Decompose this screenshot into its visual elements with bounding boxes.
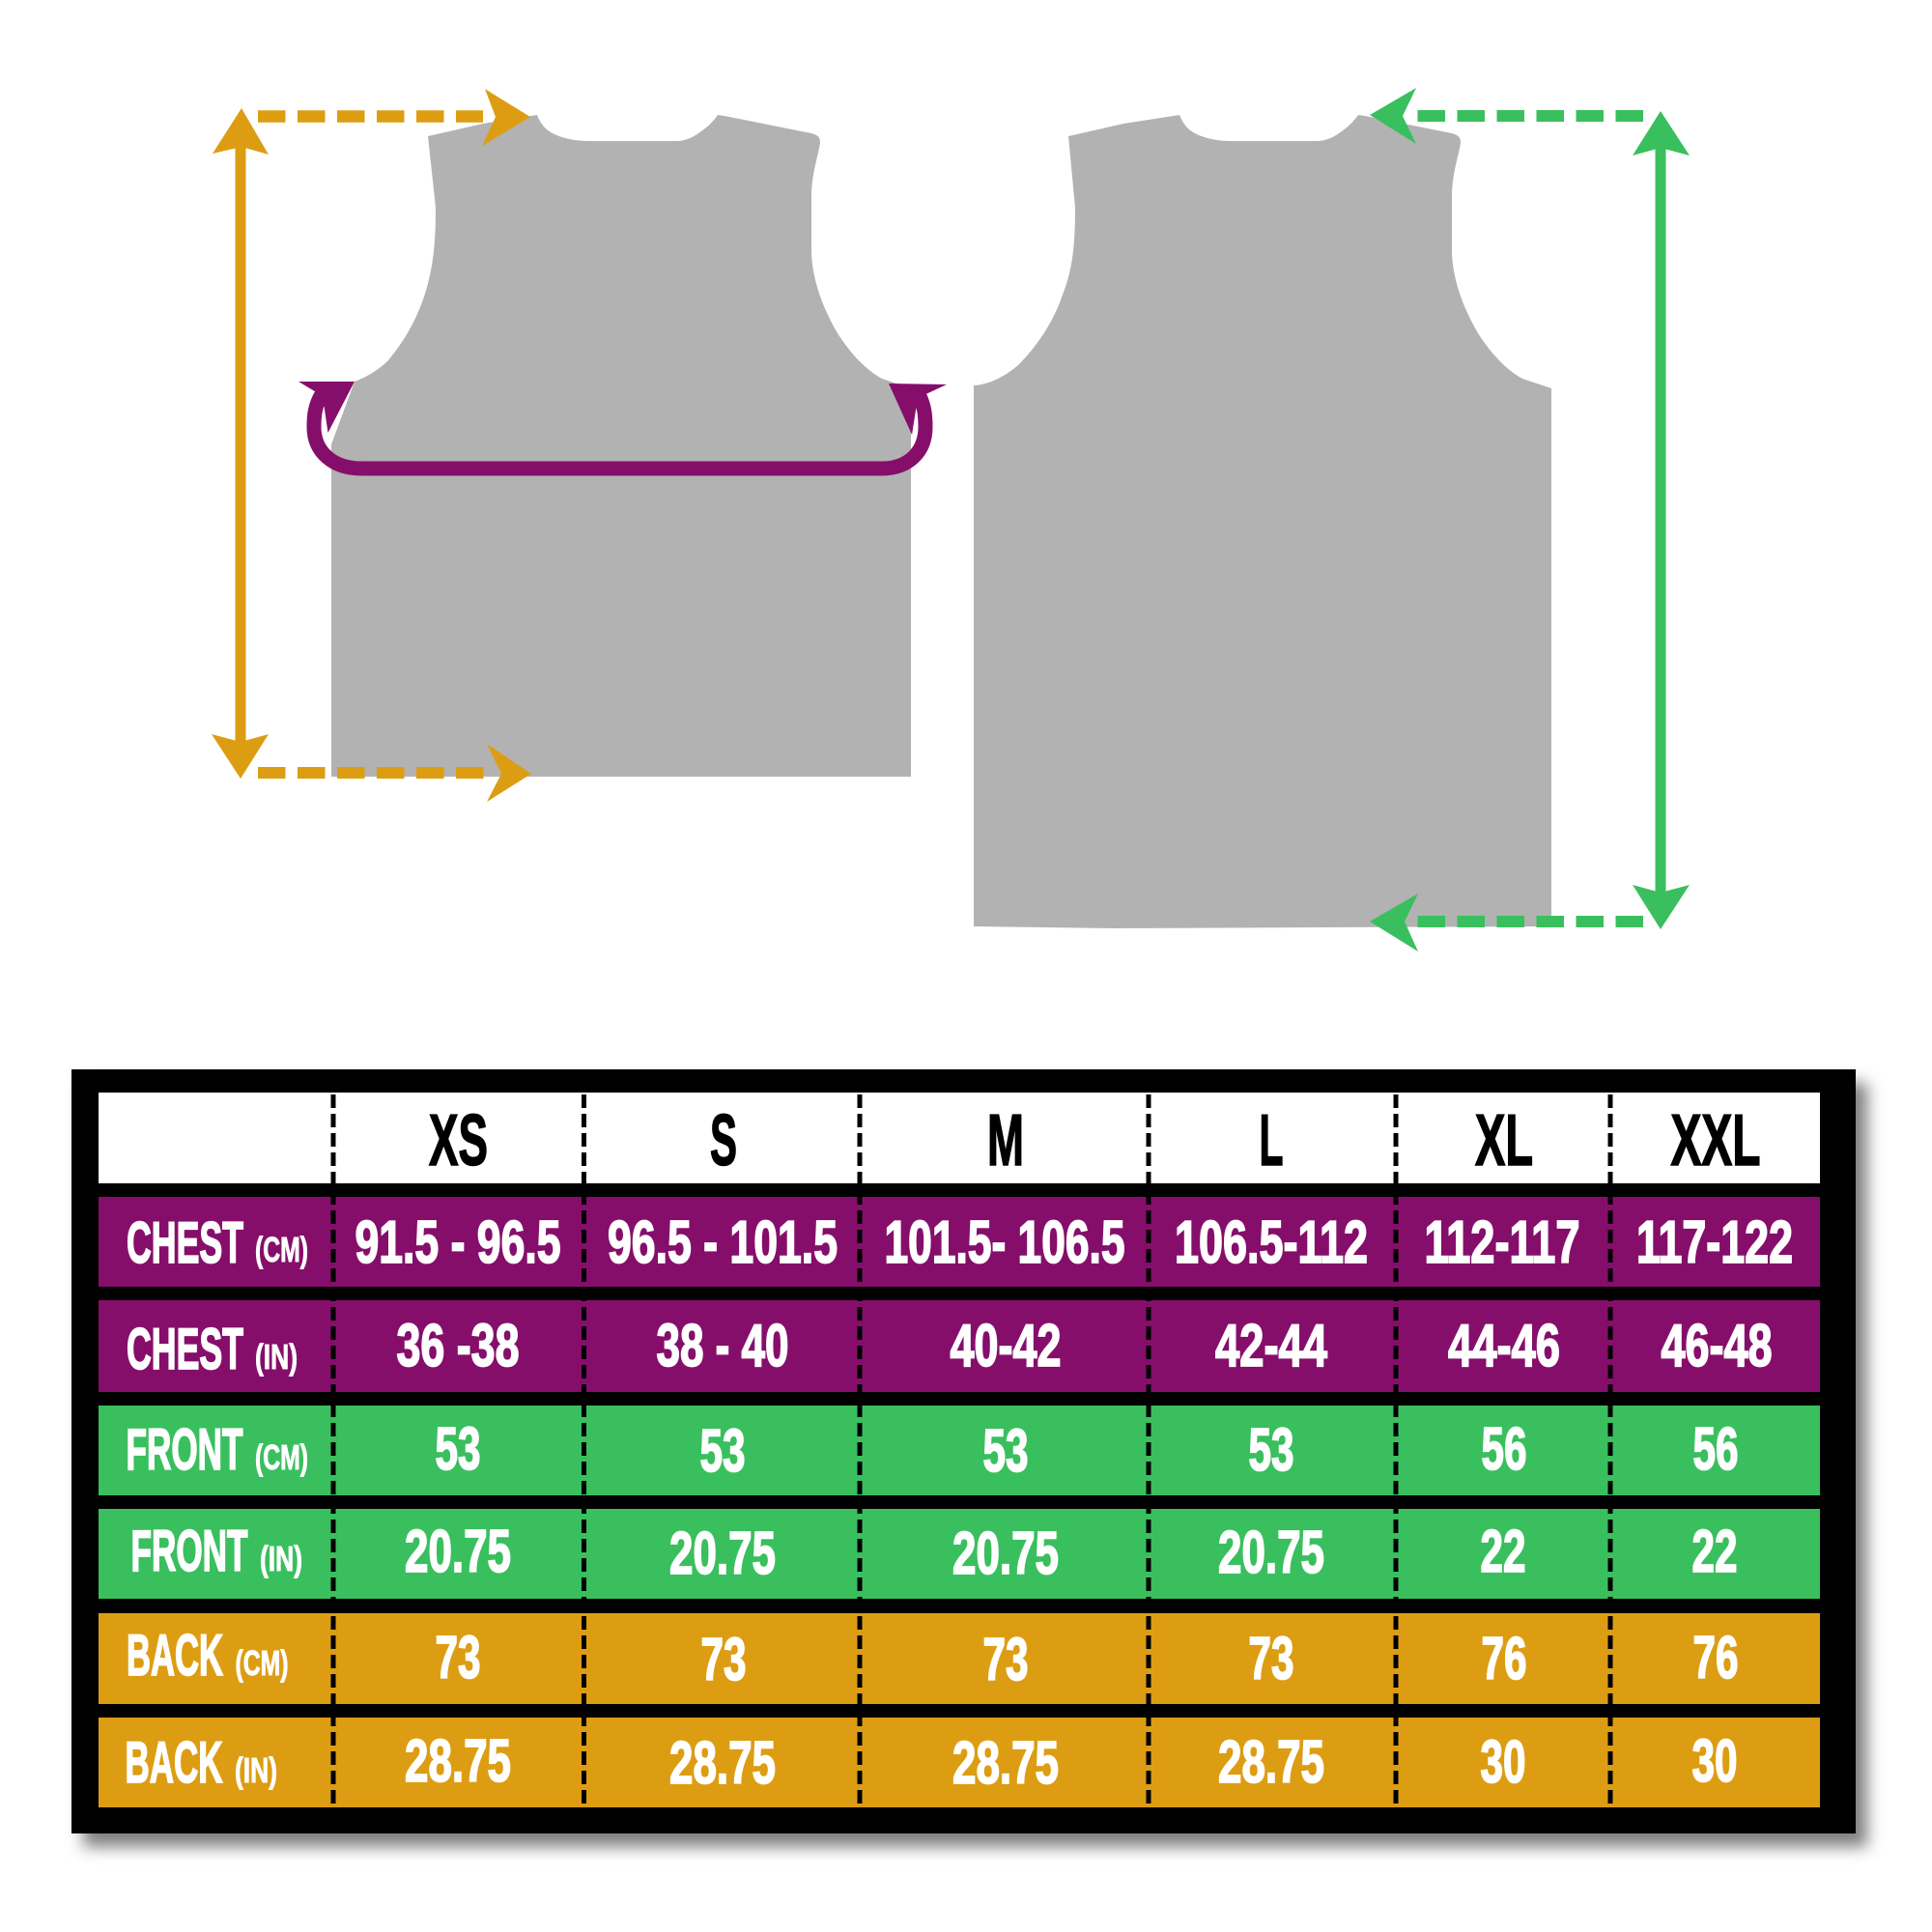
row: back cm: 76 — [1482, 1626, 1526, 1692]
row: front in: 20.75 — [1218, 1520, 1324, 1586]
row: chest in: CHEST — [127, 1317, 243, 1381]
row: back in: 28.75 — [1218, 1729, 1324, 1796]
row: front in — [99, 1509, 1820, 1599]
arrow: back length vertical — [1633, 111, 1690, 929]
arrow: front bottom dashed — [258, 744, 531, 802]
arrow: back top dashed — [1370, 88, 1643, 144]
row: chest cm: 96.5 - 101.5 — [608, 1209, 838, 1276]
row: back in — [99, 1718, 1820, 1807]
row: front cm: 53 — [1248, 1417, 1294, 1484]
row: back in: 30 — [1692, 1728, 1737, 1795]
row: chest in: 42-44 — [1215, 1313, 1327, 1379]
header row — [99, 1093, 1820, 1183]
row: back cm: 76 — [1692, 1625, 1739, 1691]
row: chest cm: 106.5-112 — [1175, 1209, 1368, 1276]
row: back in: 28.75 — [405, 1728, 511, 1795]
row: chest cm: 101.5- 106.5 — [885, 1209, 1124, 1276]
row: back cm: 73 — [1248, 1626, 1294, 1692]
row: front cm — [99, 1406, 1820, 1495]
row: front cm: (CM) — [255, 1437, 308, 1477]
row: chest cm: 112-117 — [1424, 1209, 1580, 1276]
row: chest cm — [99, 1197, 1820, 1287]
row: chest in: 36 -38 — [396, 1313, 520, 1379]
row: back cm: 73 — [983, 1627, 1028, 1693]
row: chest in: 46-48 — [1662, 1313, 1772, 1379]
row: back cm: 73 — [701, 1627, 746, 1693]
arrow: back bottom dashed — [1370, 894, 1643, 952]
row: front cm: FRONT — [126, 1417, 243, 1482]
row: chest in: 44-46 — [1448, 1313, 1560, 1379]
row: front in: (IN) — [260, 1539, 302, 1578]
row: chest in: 38 - 40 — [657, 1313, 788, 1379]
row: front in: 20.75 — [669, 1520, 776, 1587]
row: back in: 28.75 — [669, 1730, 776, 1797]
header row: L — [1260, 1099, 1283, 1180]
arrow: front top dashed — [258, 89, 530, 146]
header row: XS — [429, 1099, 488, 1180]
row: back in: 28.75 — [952, 1730, 1059, 1797]
header row: M — [987, 1099, 1024, 1180]
row: front in: 22 — [1692, 1519, 1737, 1585]
row: front cm: 53 — [983, 1418, 1028, 1485]
row: chest in: (IN) — [255, 1337, 298, 1377]
row: back cm — [99, 1613, 1820, 1704]
row: front cm: 53 — [699, 1418, 746, 1485]
header row: S — [710, 1099, 737, 1180]
arrow: front length vertical — [212, 108, 269, 779]
row: front cm: 56 — [1692, 1416, 1739, 1483]
table panel — [71, 1069, 1856, 1833]
row: chest cm: 91.5 - 96.5 — [355, 1209, 560, 1276]
row: chest cm: (CM) — [255, 1230, 308, 1269]
row: front in: 20.75 — [952, 1520, 1059, 1587]
row: front in: FRONT — [131, 1519, 247, 1583]
row: chest cm: 117-122 — [1636, 1209, 1793, 1276]
row: back cm: BACK — [127, 1623, 223, 1688]
row: front cm: 53 — [435, 1416, 481, 1483]
row: chest in — [99, 1300, 1820, 1392]
row: front cm: 56 — [1482, 1416, 1526, 1483]
row: front in: 20.75 — [405, 1519, 511, 1585]
front garment silhouette — [331, 115, 911, 777]
header row: XXL — [1671, 1099, 1760, 1180]
row: back in: BACK — [126, 1730, 222, 1795]
row: back in: 30 — [1480, 1729, 1526, 1796]
row: chest cm: CHEST — [127, 1210, 243, 1275]
row: back in: (IN) — [235, 1750, 277, 1790]
header row: XL — [1475, 1099, 1533, 1180]
row: chest in: 40-42 — [951, 1313, 1061, 1379]
row: back cm: 73 — [435, 1625, 481, 1691]
row: front in: 22 — [1480, 1519, 1526, 1585]
arrow: chest measurement — [298, 382, 947, 469]
row: back cm: (CM) — [236, 1643, 288, 1683]
back garment silhouette — [974, 115, 1551, 928]
